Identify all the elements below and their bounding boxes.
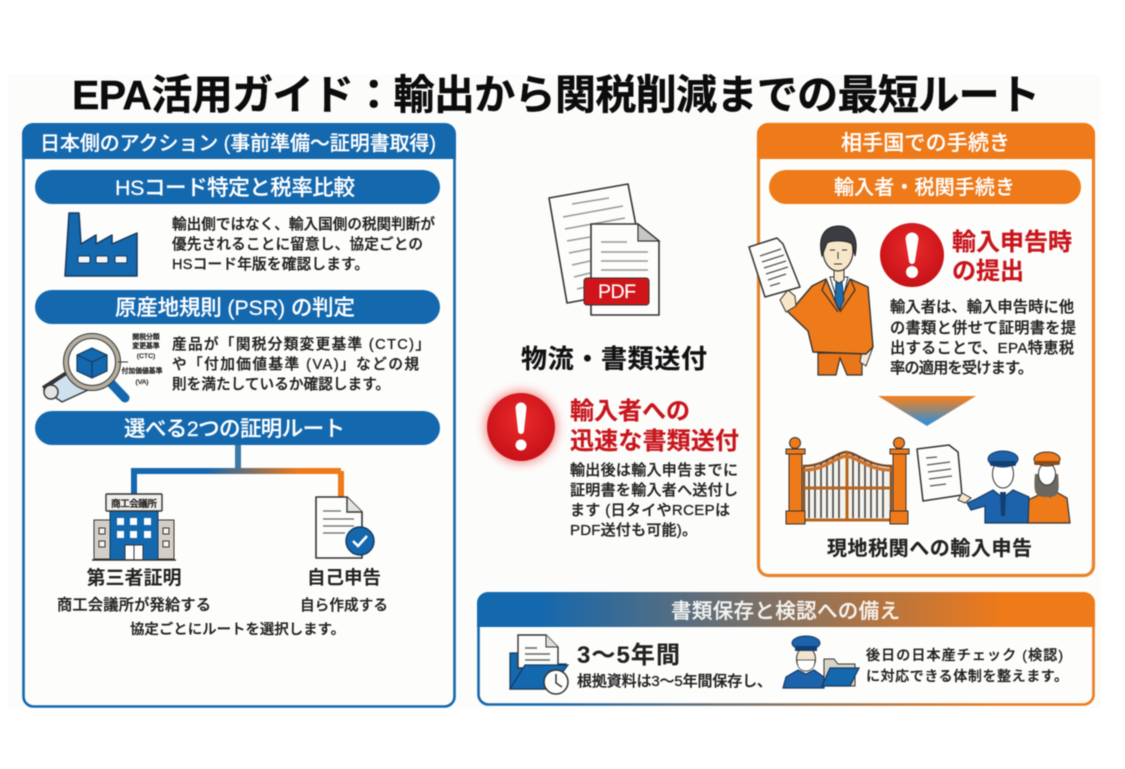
text: verification readiness [866, 647, 1068, 684]
text: document sending description: 輸出後は輸入申告までに [570, 462, 738, 479]
icon: magnifier over conveyor with box [43, 334, 128, 402]
pill heading: importer and customs [769, 170, 1081, 204]
text: HS code description: 優先されることに留意し、協定ごとの [172, 235, 423, 253]
text: magnifier small labels: (VA) [135, 379, 149, 386]
panel: Japan side actions [22, 123, 456, 706]
text: document sending description: PDF送付も可能)。 [570, 522, 697, 539]
icon: self declaration document [316, 497, 374, 558]
text: document sending description: ます (日タイやRCEPは [570, 502, 730, 519]
text: HS code description [172, 215, 435, 273]
icon: document held by customs officers [917, 445, 1070, 523]
text: 3 to 5 years: 3〜5年間 [577, 642, 680, 669]
route label: third party: 商工会議所が発給する [57, 596, 211, 614]
icon: red alert [880, 223, 944, 287]
text: document sending description: 証明書を輸入者へ送付し [570, 482, 738, 499]
route label: self declaration: 自ら作成する [300, 597, 388, 614]
callout heading: quick document sending: 輸入者への [570, 398, 690, 425]
icon: chamber of commerce building [92, 494, 176, 560]
callout heading: quick document sending [570, 398, 739, 455]
icon: businessman holding document [749, 226, 873, 375]
text: 3 to 5 years: 根拠資料は3〜5年間保存し、 [577, 673, 772, 690]
panel header: gradient bar: 書類保存と検認への備え [671, 600, 900, 623]
route label: third party [57, 567, 211, 614]
pill heading: importer and customs: 輸入者・税関手続き [834, 176, 1015, 199]
panel: partner country procedures [749, 123, 1095, 576]
arrow: down triangle [878, 396, 976, 426]
panel header: partner country [757, 123, 1095, 159]
pill heading: HS code [35, 170, 440, 204]
text: verification readiness: に対応できる体制を整えます。 [866, 668, 1068, 684]
icon: chamber of commerce building: 商工会議所 [111, 498, 157, 510]
route label: third party: 第三者証明 [86, 567, 182, 589]
icon: red alert with glow [485, 391, 557, 463]
text: PSR description: 則を満たしているか確認します。 [172, 376, 390, 393]
icon: PDF documents: PDF [598, 281, 636, 303]
text: PSR description [172, 335, 430, 393]
panel: document retention and verification [477, 592, 1095, 704]
panel header: partner country: 相手国での手続き [841, 132, 1010, 155]
pill heading: PSR: 原産地規則 (PSR) の判定 [115, 296, 355, 320]
pill heading: HS code: HSコード特定と税率比較 [115, 176, 355, 200]
text: HS code description: 輸出側ではなく、輸入国側の税関判断が [172, 215, 435, 233]
title: EPA活用ガイド：輸出から関税削減までの最短ルート [72, 72, 1040, 118]
icon: factory [65, 213, 137, 276]
panel header: gradient bar [477, 592, 1095, 627]
text: magnifier small labels: 付加価値基準 [122, 366, 163, 375]
pill heading: PSR [35, 290, 440, 324]
text: route note: 協定ごとにルートを選択します。 [130, 620, 345, 638]
text: magnifier small labels: 変更基準 [132, 341, 160, 350]
panel header: Japan side: 日本側のアクション (事前準備〜証明書取得) [40, 132, 436, 155]
text: magnifier small labels [122, 332, 163, 386]
connector: route branches [134, 445, 341, 497]
text: 3 to 5 years [577, 642, 772, 690]
text: verification readiness: 後日の日本産チェック (検認) [866, 647, 1063, 663]
text: import declaration at customs: 現地税関への輸入申告 [827, 537, 1032, 560]
text: magnifier small labels: (CTC) [137, 353, 155, 360]
panel header: Japan side [22, 123, 456, 159]
text: importer description: 出することで、EPA特恵税 [890, 339, 1074, 357]
pill heading: two routes: 選べる2つの証明ルート [124, 417, 345, 441]
callout heading: submission at import declaration [952, 229, 1072, 285]
text: HS code description: HSコード年版を確認します。 [172, 256, 369, 273]
callout heading: quick document sending: 迅速な書類送付 [570, 428, 739, 455]
text: magnifier small labels: 関税分類 [132, 332, 160, 341]
text: importer description: 輸入者は、輸入申告時に他 [890, 299, 1074, 316]
text: importer description: の書類と併せて証明書を提 [890, 320, 1076, 337]
callout heading: submission at import declaration: の提出 [952, 258, 1024, 285]
icon: folder with clock [510, 635, 568, 694]
route label: self declaration [300, 567, 388, 614]
text: document sending description [570, 462, 738, 539]
pill heading: two routes [35, 411, 440, 445]
route label: self declaration: 自己申告 [307, 567, 381, 588]
callout heading: submission at import declaration: 輸入申告時 [952, 229, 1072, 256]
text: importer description [890, 299, 1076, 377]
heading: logistics and documents: 物流・書類送付 [521, 344, 707, 374]
text: PSR description: 産品が「関税分類変更基準 (CTC)」 [172, 335, 430, 353]
icon: officer with folder [783, 636, 859, 688]
text: PSR description: や「付加価値基準 (VA)」などの規 [172, 356, 419, 373]
icon: customs gate [786, 438, 909, 524]
text: importer description: 率の適用を受けます。 [890, 359, 1033, 377]
icon: PDF documents [549, 184, 659, 315]
